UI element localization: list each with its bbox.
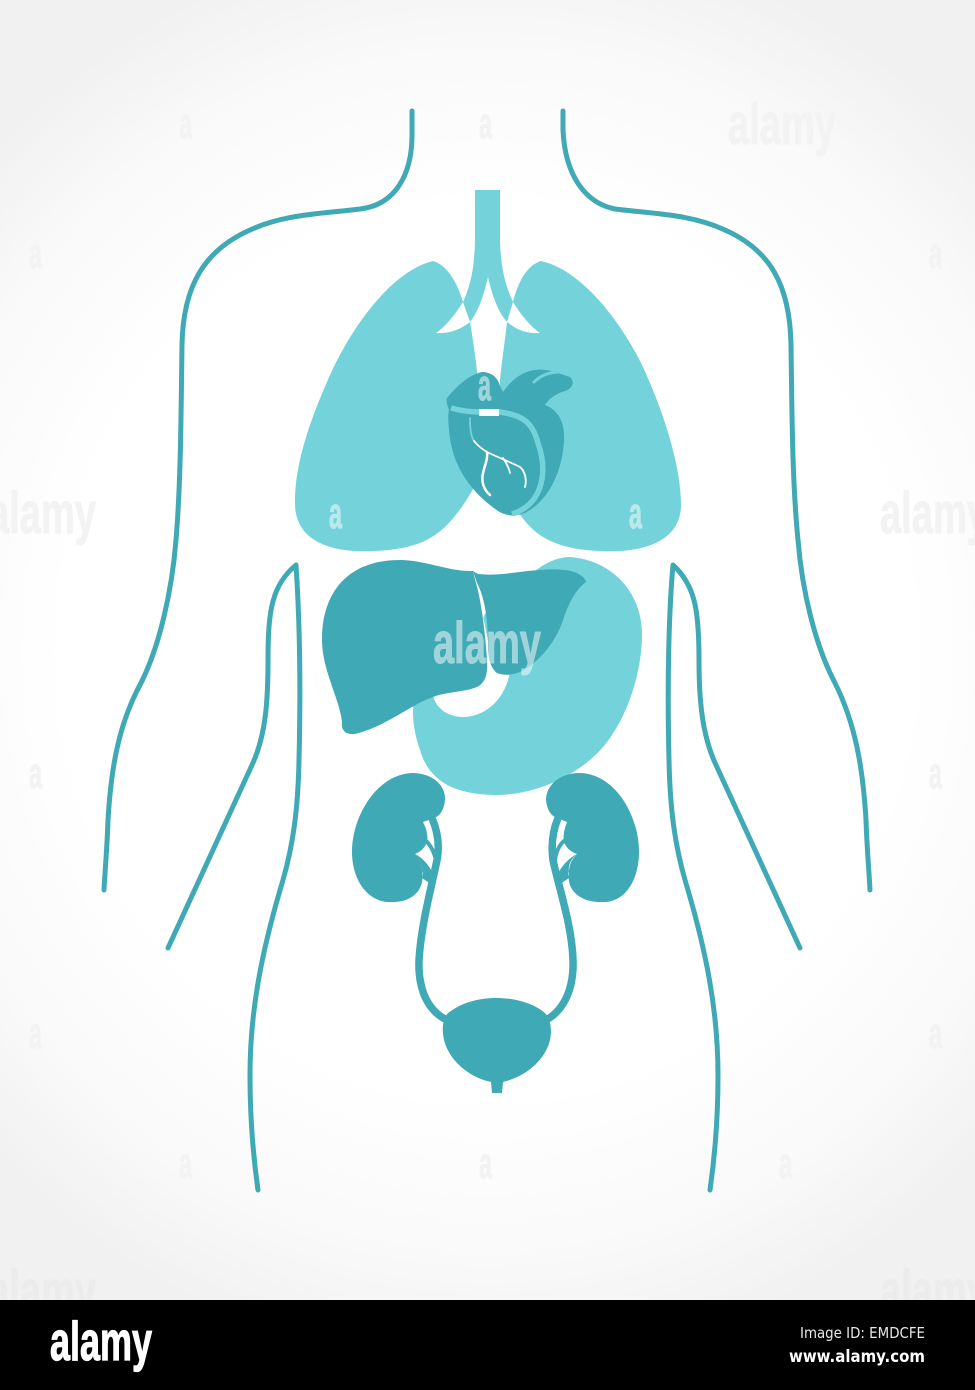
bladder (443, 998, 551, 1093)
liver right lobe (473, 569, 586, 675)
heart body (447, 370, 573, 515)
right lung watermark: a (629, 489, 642, 538)
urinary system (352, 773, 639, 1093)
footer logo: alamy (50, 1310, 152, 1372)
left outer contour (104, 111, 412, 890)
right lung (500, 261, 681, 551)
background watermarks: a (479, 1139, 492, 1188)
lungs and trachea (295, 190, 681, 551)
background watermarks: a (929, 229, 942, 278)
left lung watermark: a (329, 489, 342, 538)
background watermarks: a (929, 749, 942, 798)
coronary vessels (470, 418, 526, 495)
white gap in band (479, 409, 499, 416)
heart highlight band (451, 408, 543, 514)
body outline (104, 111, 870, 1190)
left inner arm and waist (168, 565, 300, 1190)
background watermarks: a (929, 1009, 942, 1058)
renal pelvis left (415, 854, 434, 884)
background watermarks: alamy (728, 92, 836, 157)
background watermarks: a (179, 99, 192, 148)
ureters (419, 818, 573, 1021)
stomach inner curve (433, 583, 510, 717)
liver left lobe (322, 560, 487, 734)
heart watermark: a (478, 361, 491, 410)
right kidney (546, 773, 639, 902)
background watermarks: a (779, 1139, 792, 1188)
stomach (413, 557, 642, 795)
central watermark: alamy (433, 611, 541, 676)
liver (322, 560, 586, 734)
right inner arm and waist (668, 565, 800, 1190)
background watermarks: a (29, 229, 42, 278)
left kidney (352, 773, 445, 902)
right outer contour (563, 111, 870, 890)
background watermarks: a (29, 1009, 42, 1058)
trachea and bronchi (463, 190, 513, 322)
renal branches (425, 840, 565, 860)
site url: www.alamy.com (789, 1347, 925, 1367)
footer bar (0, 1300, 975, 1390)
liver fissure top (475, 580, 486, 618)
aorta highlight (534, 372, 560, 382)
left lung (295, 261, 478, 551)
renal pelvis right (557, 854, 577, 884)
image id: Image ID: EMDCFE (800, 1324, 925, 1342)
background watermarks: a (479, 99, 492, 148)
background watermarks: a (29, 749, 42, 798)
organ watermarks (329, 361, 642, 676)
heart (447, 370, 573, 515)
background watermarks: a (179, 1139, 192, 1188)
